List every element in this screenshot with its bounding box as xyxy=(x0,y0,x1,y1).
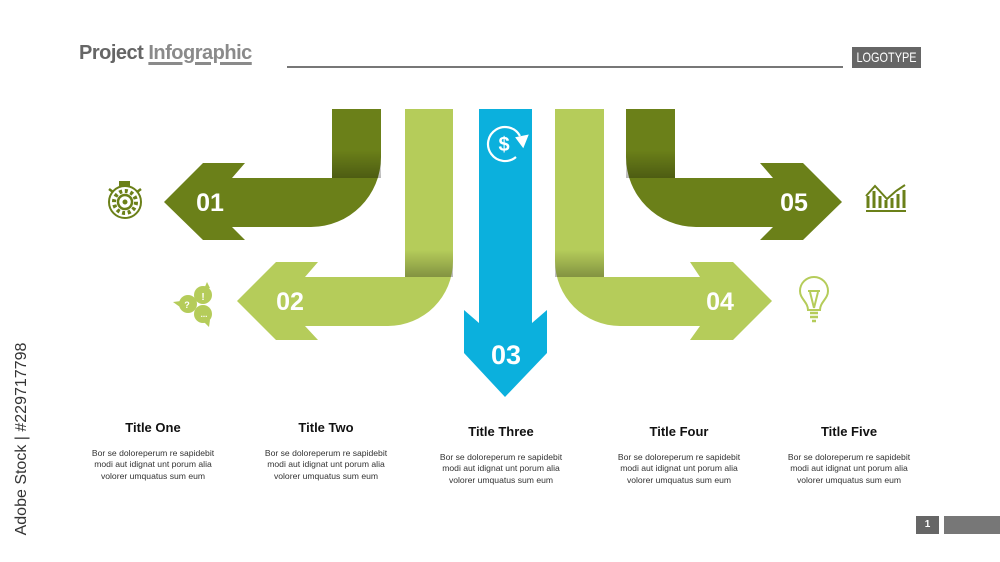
text: title four: volorer umquatus sum eum xyxy=(627,475,731,485)
text: title one: Title One xyxy=(125,420,181,435)
text: title two xyxy=(265,420,388,481)
text: title three: modi aut idignat unt porum alia xyxy=(442,463,560,473)
icon: dollar cycle: $ xyxy=(498,134,510,156)
text: title two: Title Two xyxy=(298,420,354,435)
arrow 03 xyxy=(464,109,547,397)
icon: speech bubbles: ? xyxy=(184,300,190,310)
text: title one: volorer umquatus sum eum xyxy=(101,471,205,481)
text: title five: Title Five xyxy=(821,424,877,439)
arrow 01: 01 xyxy=(196,189,224,217)
text: title three xyxy=(440,424,562,485)
logotype xyxy=(852,47,921,68)
page number: 1 xyxy=(925,519,930,530)
text: title five xyxy=(788,424,910,485)
text: title four: Bor se doloreperum re sapidebit xyxy=(618,452,740,462)
icon: speech bubbles: ! xyxy=(201,292,205,303)
logotype: LOGOTYPE xyxy=(856,49,917,65)
text: title three: volorer umquatus sum eum xyxy=(449,475,553,485)
text: title one: Bor se doloreperum re sapidebit xyxy=(92,448,214,458)
text: title two: Bor se doloreperum re sapidebit xyxy=(265,448,387,458)
text: title four: modi aut idignat unt porum alia xyxy=(620,463,738,473)
arrow 02: 02 xyxy=(276,288,304,316)
icon: stopwatch gear xyxy=(109,181,141,218)
text: title three: Bor se doloreperum re sapidebit xyxy=(440,452,562,462)
icon: speech bubbles xyxy=(173,282,212,327)
footer bar xyxy=(944,516,1000,534)
arrow 05 xyxy=(626,109,842,240)
arrow 01 xyxy=(164,109,381,240)
header line xyxy=(287,66,843,68)
arrow 03: 03 xyxy=(491,340,521,370)
text: title five: volorer umquatus sum eum xyxy=(797,475,901,485)
text: title two: volorer umquatus sum eum xyxy=(274,471,378,481)
text: title five: Bor se doloreperum re sapidebit xyxy=(788,452,910,462)
text: title four xyxy=(618,424,740,485)
text: title one: modi aut idignat unt porum alia xyxy=(94,459,212,469)
text: title five: modi aut idignat unt porum alia xyxy=(790,463,908,473)
text: title four: Title Four xyxy=(650,424,708,439)
text: title one xyxy=(92,420,214,481)
arrow 05: 05 xyxy=(780,189,808,217)
page number xyxy=(916,516,939,534)
icon: lightbulb xyxy=(800,277,828,321)
icon: bar chart xyxy=(866,185,906,211)
arrow 04: 04 xyxy=(706,288,734,316)
watermark side text: Adobe Stock | #229717798 xyxy=(13,343,30,535)
text: title two: modi aut idignat unt porum alia xyxy=(267,459,385,469)
icon: dollar cycle xyxy=(488,127,527,161)
text: title three: Title Three xyxy=(468,424,534,439)
arrow 02 xyxy=(237,109,453,340)
icon: speech bubbles: ... xyxy=(201,310,207,319)
title: Project Infographic xyxy=(79,42,252,64)
arrow 04 xyxy=(555,109,772,340)
